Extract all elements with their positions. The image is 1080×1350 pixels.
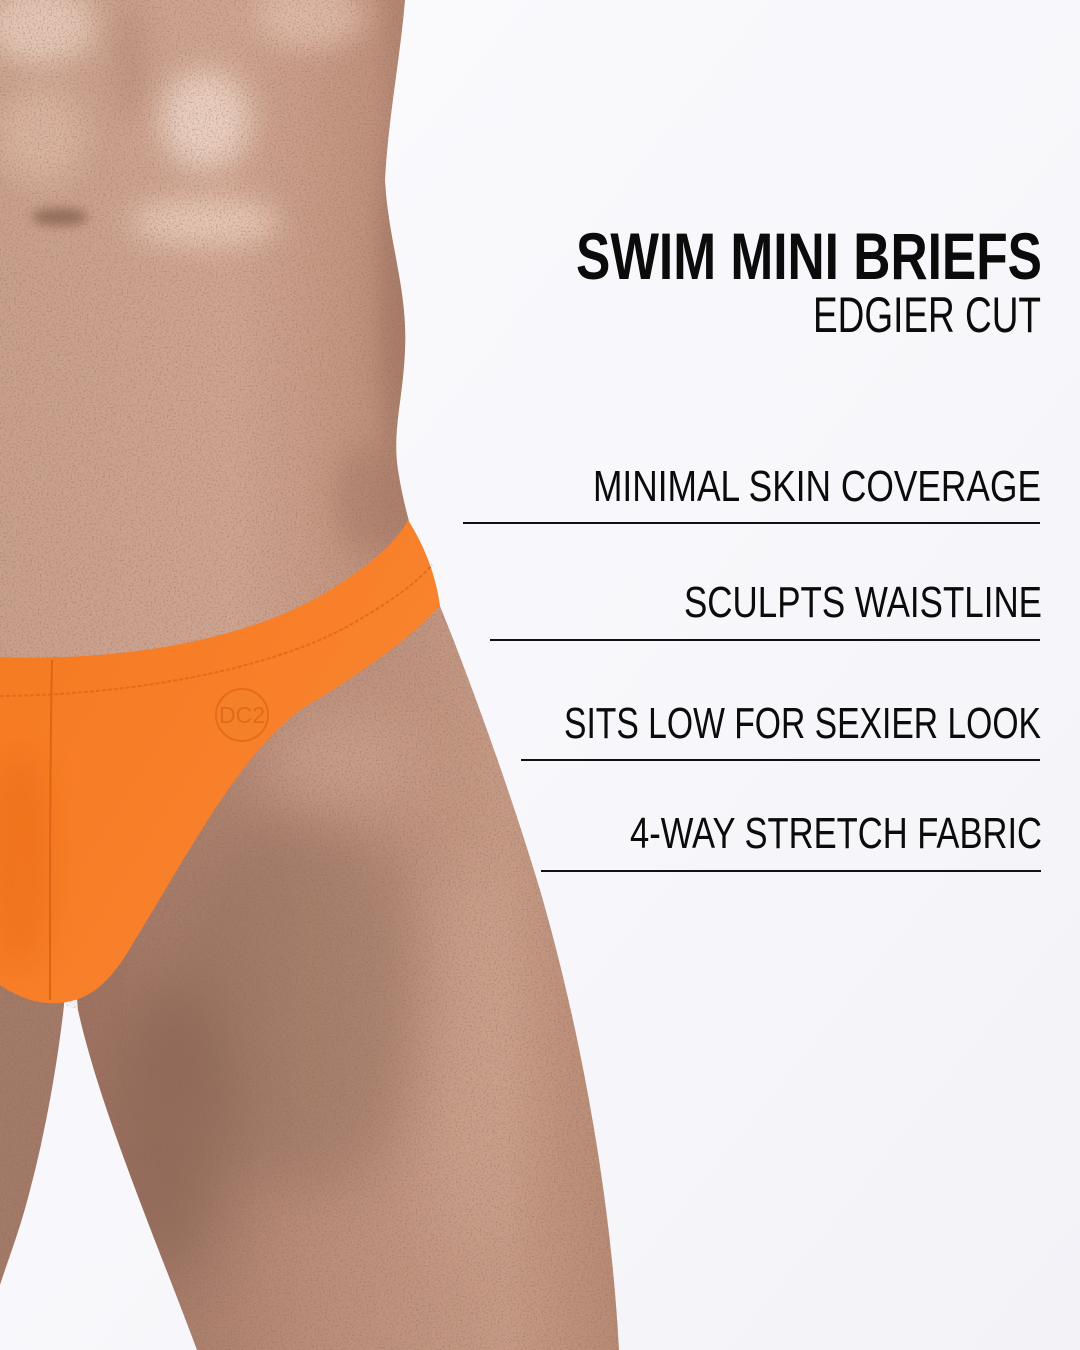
torso <box>0 0 422 690</box>
body shading and highlights <box>0 0 640 1350</box>
navel <box>32 208 88 226</box>
logo badge <box>216 689 268 741</box>
waistband stitching <box>0 565 432 696</box>
pouch shading <box>0 750 55 970</box>
skin and hair texture <box>0 0 640 1350</box>
title <box>576 219 1042 343</box>
photo: model wearing swim mini briefs <box>0 0 640 1350</box>
centre seam <box>50 660 52 1000</box>
left leg <box>0 900 70 1285</box>
right thigh <box>60 606 619 1350</box>
logo badge: DC2 <box>219 702 265 728</box>
swim mini briefs garment <box>0 520 440 1003</box>
